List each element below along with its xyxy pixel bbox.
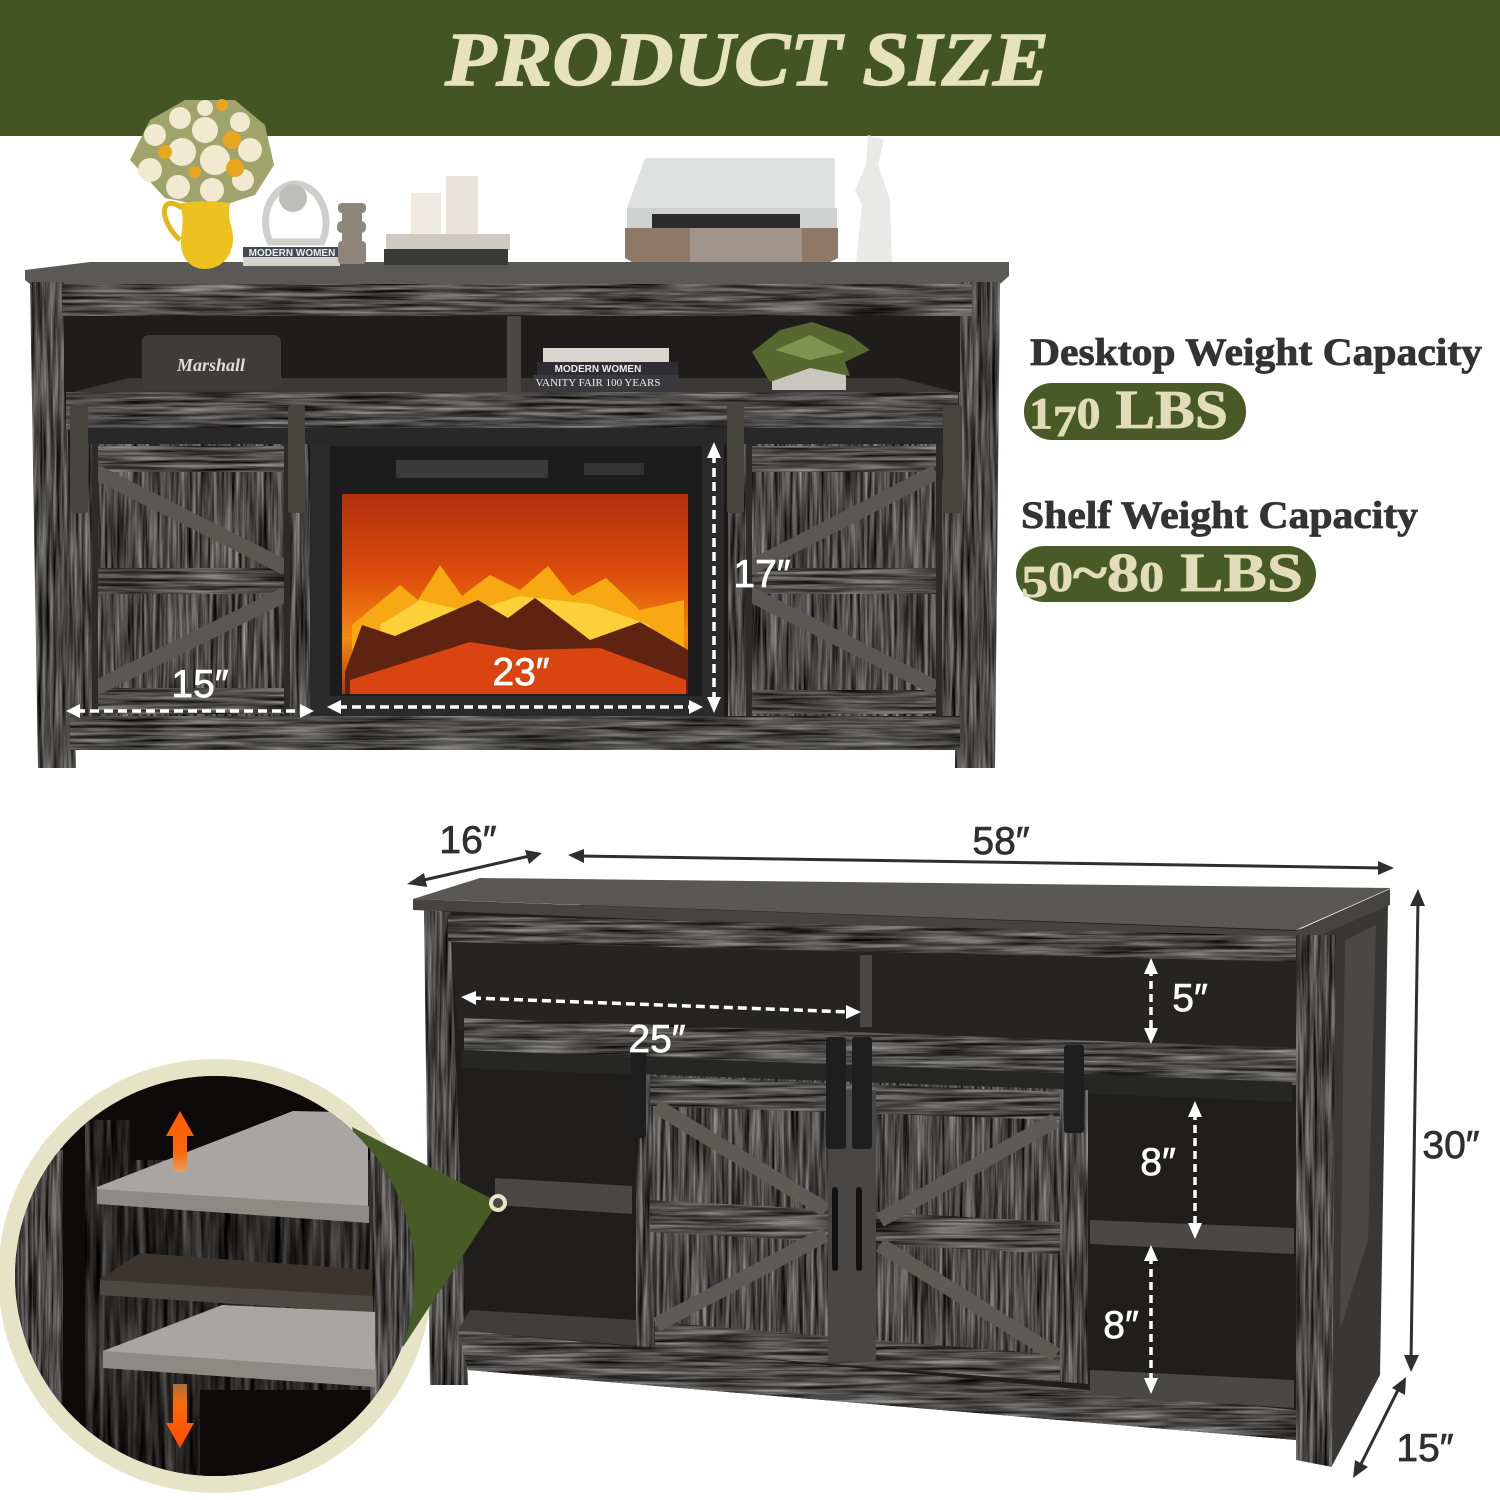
right barn door [728,444,960,716]
header banner [0,0,1500,136]
shelf books: MODERN WOMEN [555,364,641,375]
Marshall speaker: Marshall [176,355,245,375]
dimension 58 inch width [568,820,1394,875]
front view TV stand with fireplace [25,99,1009,768]
dimension 30 inch height [1404,889,1480,1372]
desktop weight capacity [1024,331,1483,446]
50~80 LBS badge: ~80 LBS [1073,542,1282,603]
statue [855,135,892,262]
dimension 25 inch [461,991,861,1061]
dimension 15 inch side depth [1353,1377,1454,1478]
lower lowered shelf [103,1305,375,1370]
shelf weight capacity [1016,494,1419,607]
perspective view TV stand [413,878,1391,1467]
shelf weight capacity: Shelf Weight Capacity [1021,494,1419,537]
shelf books: VANITY FAIR 100 YEARS [536,377,660,389]
170 LBS badge: LBS [1114,379,1218,440]
down arrow [166,1384,194,1448]
Marshall speaker [142,335,281,390]
dimension 25 inch: 25″ [628,1018,686,1061]
dimension 15 inch door [66,663,314,718]
candles and books [384,176,510,265]
dimension 16 inch depth [407,819,542,887]
title: PRODUCT SIZE [444,18,1049,102]
decor knot sculpture and books [243,184,366,266]
dimension 16 inch depth: 16″ [439,819,497,862]
dimension 5 inch: 5″ [1172,977,1208,1020]
electric fireplace [310,444,724,716]
dimension 8 inch upper: 8″ [1140,1141,1176,1184]
dimension 23 inch fireplace width [327,651,703,714]
170 LBS badge [1024,379,1246,446]
fixed middle shelf [100,1253,372,1296]
dimension 17 inch fireplace height [707,442,791,713]
170 LBS badge: 7 [1053,397,1077,446]
decor knot sculpture and books: MODERN WOMEN [249,248,335,259]
zoom focus point [491,1196,505,1210]
50~80 LBS badge: 0 [1048,555,1073,601]
left barn door [70,444,310,716]
dimension 15 inch side depth: 15″ [1396,1427,1454,1470]
170 LBS badge: 1 [1029,389,1053,438]
up arrow [166,1111,194,1172]
dimension 58 inch width: 58″ [972,820,1030,863]
sliding door rail [70,405,962,513]
dimension 8 inch lower: 8″ [1103,1304,1139,1347]
barn doors [636,1074,1088,1384]
dimension 5 inch [1144,958,1208,1044]
50~80 LBS badge: 5 [1021,556,1048,607]
dimension 17 inch fireplace height: 17″ [733,553,791,596]
zoom connector wedge [352,1127,498,1347]
record player [625,158,838,262]
dimension 30 inch height: 30″ [1422,1124,1480,1167]
magnified detail lens: adjustable shelves [0,1059,498,1500]
desktop weight capacity: Desktop Weight Capacity [1030,331,1483,374]
dimension 23 inch fireplace width: 23″ [492,651,550,694]
plant in pot [752,322,870,390]
dimension 8 inch lower [1103,1245,1158,1394]
shelf books [533,348,679,390]
vase with flowers [130,99,274,269]
dimension 15 inch door: 15″ [171,663,229,706]
sliding door hardware [631,1037,1084,1149]
upper raised shelf [97,1111,368,1206]
50~80 LBS badge [1016,542,1316,607]
dimension 8 inch upper [1140,1101,1202,1239]
170 LBS badge: 0 [1077,389,1100,438]
